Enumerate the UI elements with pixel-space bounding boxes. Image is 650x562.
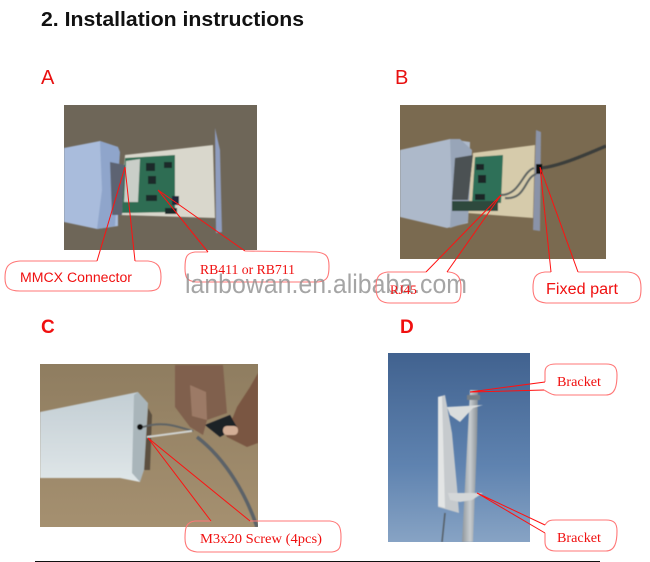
title: 2. Installation instructions — [41, 9, 304, 31]
callout: lower Bracket: Bracket — [557, 530, 601, 545]
photo B: antenna with cable fitted — [400, 105, 606, 259]
callout: upper Bracket: Bracket — [557, 374, 601, 389]
callout: MMCX Connector — [5, 167, 161, 291]
step label A: A — [41, 67, 55, 89]
callout: M3x20 Screw: M3x20 Screw (4pcs) — [200, 531, 322, 546]
callout: upper Bracket — [470, 364, 617, 395]
callout: RB411 or RB711 — [158, 190, 329, 282]
photo D: antenna mounted on pole — [388, 353, 530, 542]
callout: M3x20 Screw — [148, 438, 341, 552]
step label C: C — [41, 317, 55, 338]
callout: RJ45 — [376, 195, 501, 303]
callout: MMCX Connector: MMCX Connector — [20, 270, 133, 285]
callout: Fixed part: Fixed part — [546, 281, 619, 298]
photo A: antenna open with board — [64, 105, 257, 250]
callout: Fixed part — [533, 167, 641, 303]
callout: lower Bracket — [477, 493, 617, 551]
step label B: B — [395, 67, 408, 89]
photo C: tightening screws — [40, 364, 258, 527]
callout: RB411 or RB711: RB411 or RB711 — [200, 263, 295, 278]
callout: RJ45: RJ45 — [390, 282, 417, 297]
bottom rule — [35, 560, 600, 562]
step label D: D — [400, 317, 414, 338]
watermark: lanbowan.en.alibaba.com — [185, 269, 467, 299]
